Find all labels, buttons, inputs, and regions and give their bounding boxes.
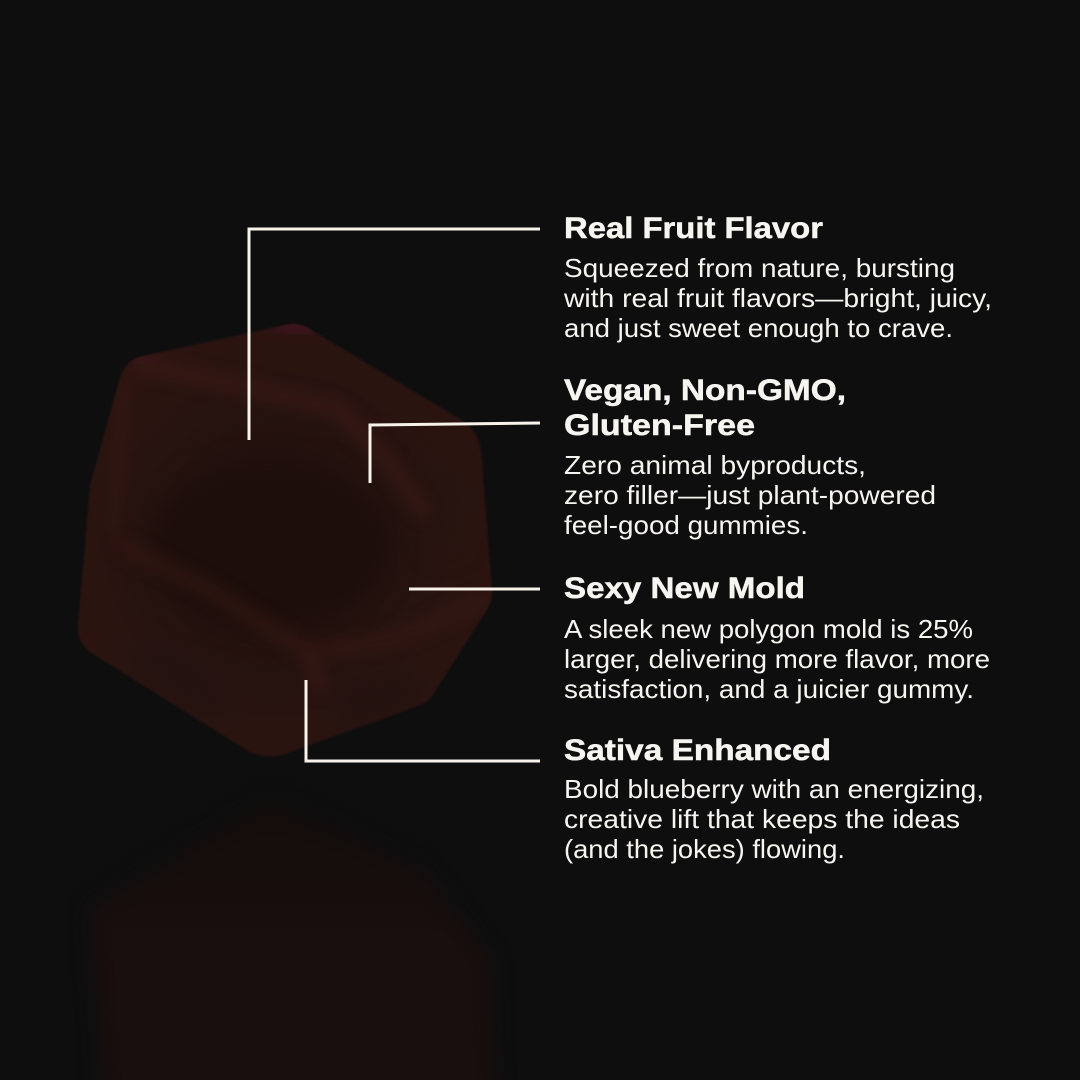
gummy polygon [78,321,492,757]
feature: vegan, non-gmo, gluten-free: Gluten-Free [564,409,755,442]
feature: sativa enhanced: Sativa Enhanced [564,734,831,767]
feature: real fruit flavor: and just sweet enough to crave. [564,313,953,343]
feature: sexy new mold: Sexy New Mold [564,572,805,605]
feature: vegan, non-gmo, gluten-free: feel-good gummies. [564,510,808,540]
feature: sativa enhanced: (and the jokes) flowing. [564,834,845,864]
feature: sativa enhanced: creative lift that keeps the ideas [564,804,960,834]
feature: sexy new mold: A sleek new polygon mold is 25% [564,614,973,644]
feature: vegan, non-gmo, gluten-free [564,374,936,540]
feature: sativa enhanced: Bold blueberry with an energizing, [564,774,984,804]
feature: sexy new mold: satisfaction, and a juicier gummy. [564,674,974,704]
callout line: sativa enhanced [306,680,540,761]
reflection of gummy [90,800,495,1080]
feature: real fruit flavor: Real Fruit Flavor [564,212,823,245]
callout line: sexy new mold [409,588,540,590]
feature: vegan, non-gmo, gluten-free: zero filler—just plant-powered [564,480,936,510]
feature: vegan, non-gmo, gluten-free: Vegan, Non-GMO, [564,374,846,407]
feature: vegan, non-gmo, gluten-free: Zero animal byproducts, [564,450,866,480]
feature: real fruit flavor: with real fruit flavors—bright, juicy, [563,283,992,313]
callout line: vegan [370,423,540,483]
callout line: real fruit flavor [249,229,540,440]
feature: sexy new mold [564,572,990,704]
feature: real fruit flavor: Squeezed from nature, bursting [564,253,955,283]
feature: sativa enhanced [564,734,984,864]
feature: sexy new mold: larger, delivering more flavor, more [564,644,990,674]
feature: real fruit flavor [563,212,992,343]
